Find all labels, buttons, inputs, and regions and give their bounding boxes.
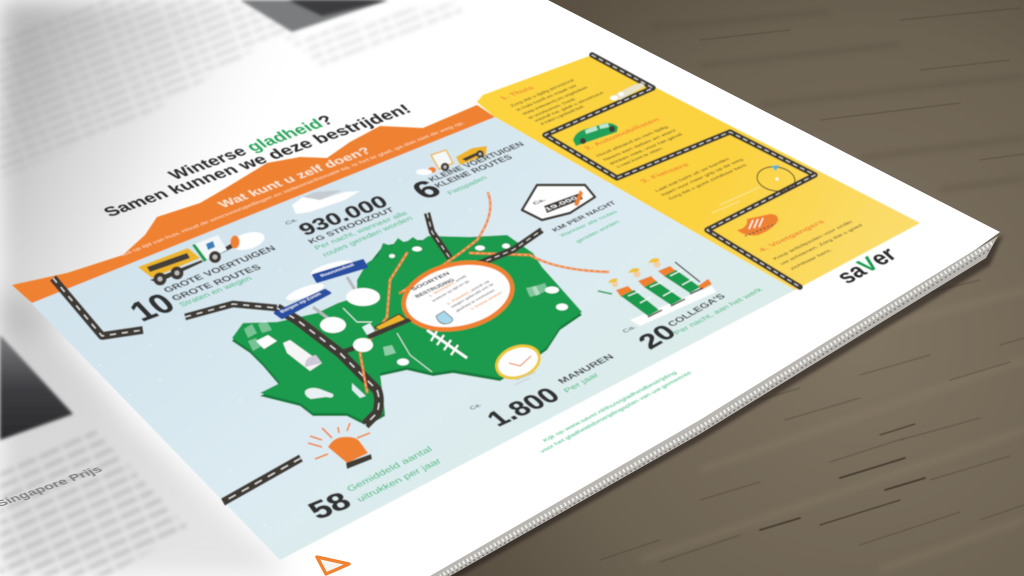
icon: large gritting truck (138, 229, 266, 286)
snow on road (612, 83, 645, 100)
website note: Kijk op www.saver.nl/thuis/gladheidbestrijding (542, 371, 679, 443)
tip: Fietsers: Laat wat lucht uit uw banden (654, 157, 732, 193)
icon: bicycle wheel (712, 164, 796, 213)
worker 2 (628, 268, 685, 306)
worker 3 (648, 258, 703, 294)
inlet snow (352, 383, 366, 398)
stat: km per nacht: Wanneer alle routes (559, 210, 619, 238)
stat: km per nacht (550, 200, 622, 244)
banner heading: Wat kunt u zelf doen? (215, 145, 374, 210)
panel: orange banner (12, 105, 495, 303)
stat: 930.000 kg strooizout: 930.000 (294, 192, 392, 239)
stat: 58 uitrukken: Gemiddeld aantal (345, 445, 435, 494)
sign: Roosendaal: Roosendaal (319, 263, 357, 278)
serpentine road (545, 55, 815, 287)
tip: Fietsers: Zorg dat u goed zichtbaar bent. (667, 163, 750, 201)
road signs (275, 257, 380, 333)
snow under workers (630, 286, 716, 326)
stat: 930.000 kg strooizout: Per nacht, wanneer alle (312, 209, 410, 251)
top roads entering circle (427, 213, 542, 264)
lower road (223, 458, 301, 502)
tip: Fietsers: 3. Fietsers (638, 162, 691, 184)
tip: Voetgangers: zichtbaar bent. (789, 248, 834, 271)
tip: Thuis: in huis heeft en maak uw (515, 84, 579, 112)
stat: 930.000 kg strooizout: routes gereden worden (320, 214, 415, 258)
snow specks (99, 179, 691, 526)
logo: Saver: saVer (828, 243, 905, 287)
title: Samen kunnen we deze bestrijden! (99, 101, 415, 219)
tip: Voetgangers: 4. Voetgangers (757, 218, 828, 253)
tip: Automobilisten: drinken mee, voor het geval (608, 133, 684, 166)
orange salt route (360, 193, 608, 392)
icon: green car (573, 123, 618, 146)
stat: 58 uitrukken: 58 (301, 486, 357, 524)
circle: soorten bestrijding: sneeuw op tijd en ijs (430, 279, 470, 303)
icon: snow mounds (610, 92, 624, 100)
tip: Voetgangers: Koop antislipzolen voor onder (772, 220, 855, 261)
snowy tree (427, 330, 467, 358)
tip: Automobilisten: u vast komt te zitten. (615, 147, 666, 169)
shovel (675, 262, 712, 290)
tip: Thuis: te voorkomen. Denk (527, 97, 578, 120)
stat: 58 uitrukken: uitrukken per jaar (355, 457, 445, 504)
icon: truck on map (353, 314, 412, 352)
stat: 10 grote voertuigen: GROTE ROUTES (170, 263, 264, 303)
panel: blue infographic field (30, 117, 795, 560)
circle: soorten bestrijding: 1. Strooigoed, smelt (427, 274, 468, 298)
church (283, 340, 322, 371)
stat: 10 grote voertuigen: GROTE VOERTUIGEN (162, 244, 279, 295)
icon: odometer sign: 19.000 (543, 196, 580, 212)
tip: Thuis: vooraf na: gaat u strooizout (533, 91, 606, 123)
stat: 58 uitrukken (301, 445, 445, 524)
stat: 930.000 kg strooizout: Ca. (284, 217, 299, 226)
stat: 10 grote voertuigen: Straten en wegen (177, 274, 254, 308)
icon: odometer sign (522, 185, 595, 220)
stat: 6 kleine voertuigen: 6 (404, 175, 449, 205)
tip: Voetgangers (757, 218, 865, 271)
icon: orange warning triangle (317, 557, 349, 574)
tip: Fietsers (638, 157, 750, 201)
icon: blue bowl (436, 311, 453, 324)
icon: orange beacon (308, 423, 372, 469)
banner subtitle: Ga op tijd van huis. Houd de weersvoorspellingen en verkeersinformatie bij. Is het te glad, ga dan niet de weg op. (120, 121, 466, 257)
tip: Voetgangers: uw schoenen. Zorg dat u goed (779, 224, 865, 266)
panel: yellow tips (477, 55, 920, 290)
stat: 1.800 manuren: Per jaar (561, 371, 601, 394)
icon: clock (492, 340, 544, 385)
infographic printed on the paper (12, 55, 920, 560)
stat: 20 collega's (621, 287, 765, 353)
stat: 6 kleine voertuigen (404, 141, 527, 205)
website note (539, 371, 693, 454)
blurred neighbouring newspaper text and photos (0, 0, 480, 576)
circle: soorten bestrijding: 2. Pekelen, wordt op (445, 279, 491, 306)
stat: 20 collega's: 20 (632, 320, 682, 353)
stat: 1.800 manuren (468, 353, 617, 431)
stat: 1.800 manuren: Ca. (468, 402, 484, 411)
stat: 10 grote voertuigen: 10 (122, 288, 183, 327)
stat: 1.800 manuren: 1.800 (481, 383, 566, 431)
lake (305, 388, 333, 399)
tip: Thuis: of maken u gestrooid heeft (539, 105, 586, 126)
stat: 20 collega's: COLLEGA'S (666, 293, 728, 328)
stat: 10 grote voertuigen (122, 244, 279, 327)
frayed paper edge (428, 235, 1003, 576)
stat: km per nacht: gereden worden (575, 220, 622, 244)
tip: Automobilisten: 2. Automobilisten (582, 117, 662, 151)
tip: Automobilisten: Neem een deken en eten/ (602, 128, 679, 162)
stat: 6 kleine voertuigen: KLEINE ROUTES (432, 153, 516, 190)
tip: Thuis: Zorg dat u tijdig strooizout (509, 78, 577, 108)
stat: 1.800 manuren: MANUREN (556, 353, 617, 386)
workers (598, 258, 716, 326)
circle: soorten bestrijding: gladheid te voorkomen (454, 288, 496, 313)
road across map (277, 308, 379, 425)
stat: 20 collega's: Per nacht, aan het werk (672, 287, 765, 336)
worker 1 (598, 278, 662, 317)
stat: km per nacht: KM PER NACHT (550, 200, 618, 233)
green map (232, 193, 608, 426)
website note: voor het gladheidsbestrijdingsplan van uw gemeente (539, 371, 693, 454)
sign: Bergen op Zoom: Bergen op Zoom (279, 292, 324, 314)
left road (53, 278, 277, 336)
tip: Thuis: stoep sneeuwvrij om ongelukken (521, 86, 590, 116)
circle: soorten bestrijding: wegen gebruikt om te (449, 282, 495, 309)
circle: soorten bestrijding: BESTRIJDING (414, 278, 457, 299)
tip: Fietsers: lopen voor meer grip op de weg. (660, 157, 746, 197)
rivers (343, 308, 432, 372)
stat: 6 kleine voertuigen: Fietspaden (445, 174, 489, 196)
circle: soorten bestrijding: 3. Sneeuw schuiven (469, 291, 503, 311)
stat: 930.000 kg strooizout (284, 192, 415, 258)
title: Winterse gladheid? (164, 112, 337, 182)
stat: 930.000 kg strooizout: KG STROOIZOUT (306, 206, 396, 245)
icon: small gritting truck (416, 146, 487, 175)
stat: 20 collega's: Ca. (621, 324, 638, 334)
icon: cloud with mountain (292, 190, 360, 214)
snowy trees (244, 244, 568, 366)
tip: Automobilisten (582, 117, 684, 169)
circle: soorten bestrijding (398, 253, 518, 339)
icon: odometer sign: Ca. (532, 198, 548, 206)
circle: soorten bestrijding: SOORTEN (410, 272, 452, 292)
icon: orange shoe (737, 214, 778, 236)
tip: Thuis (498, 78, 645, 126)
tip: Automobilisten: Houd afstand en rem tijdig. (595, 125, 671, 158)
stat: 6 kleine voertuigen: KLEINE VOERTUIGEN (426, 141, 527, 184)
tip: Thuis: 1. Thuis (498, 85, 536, 101)
